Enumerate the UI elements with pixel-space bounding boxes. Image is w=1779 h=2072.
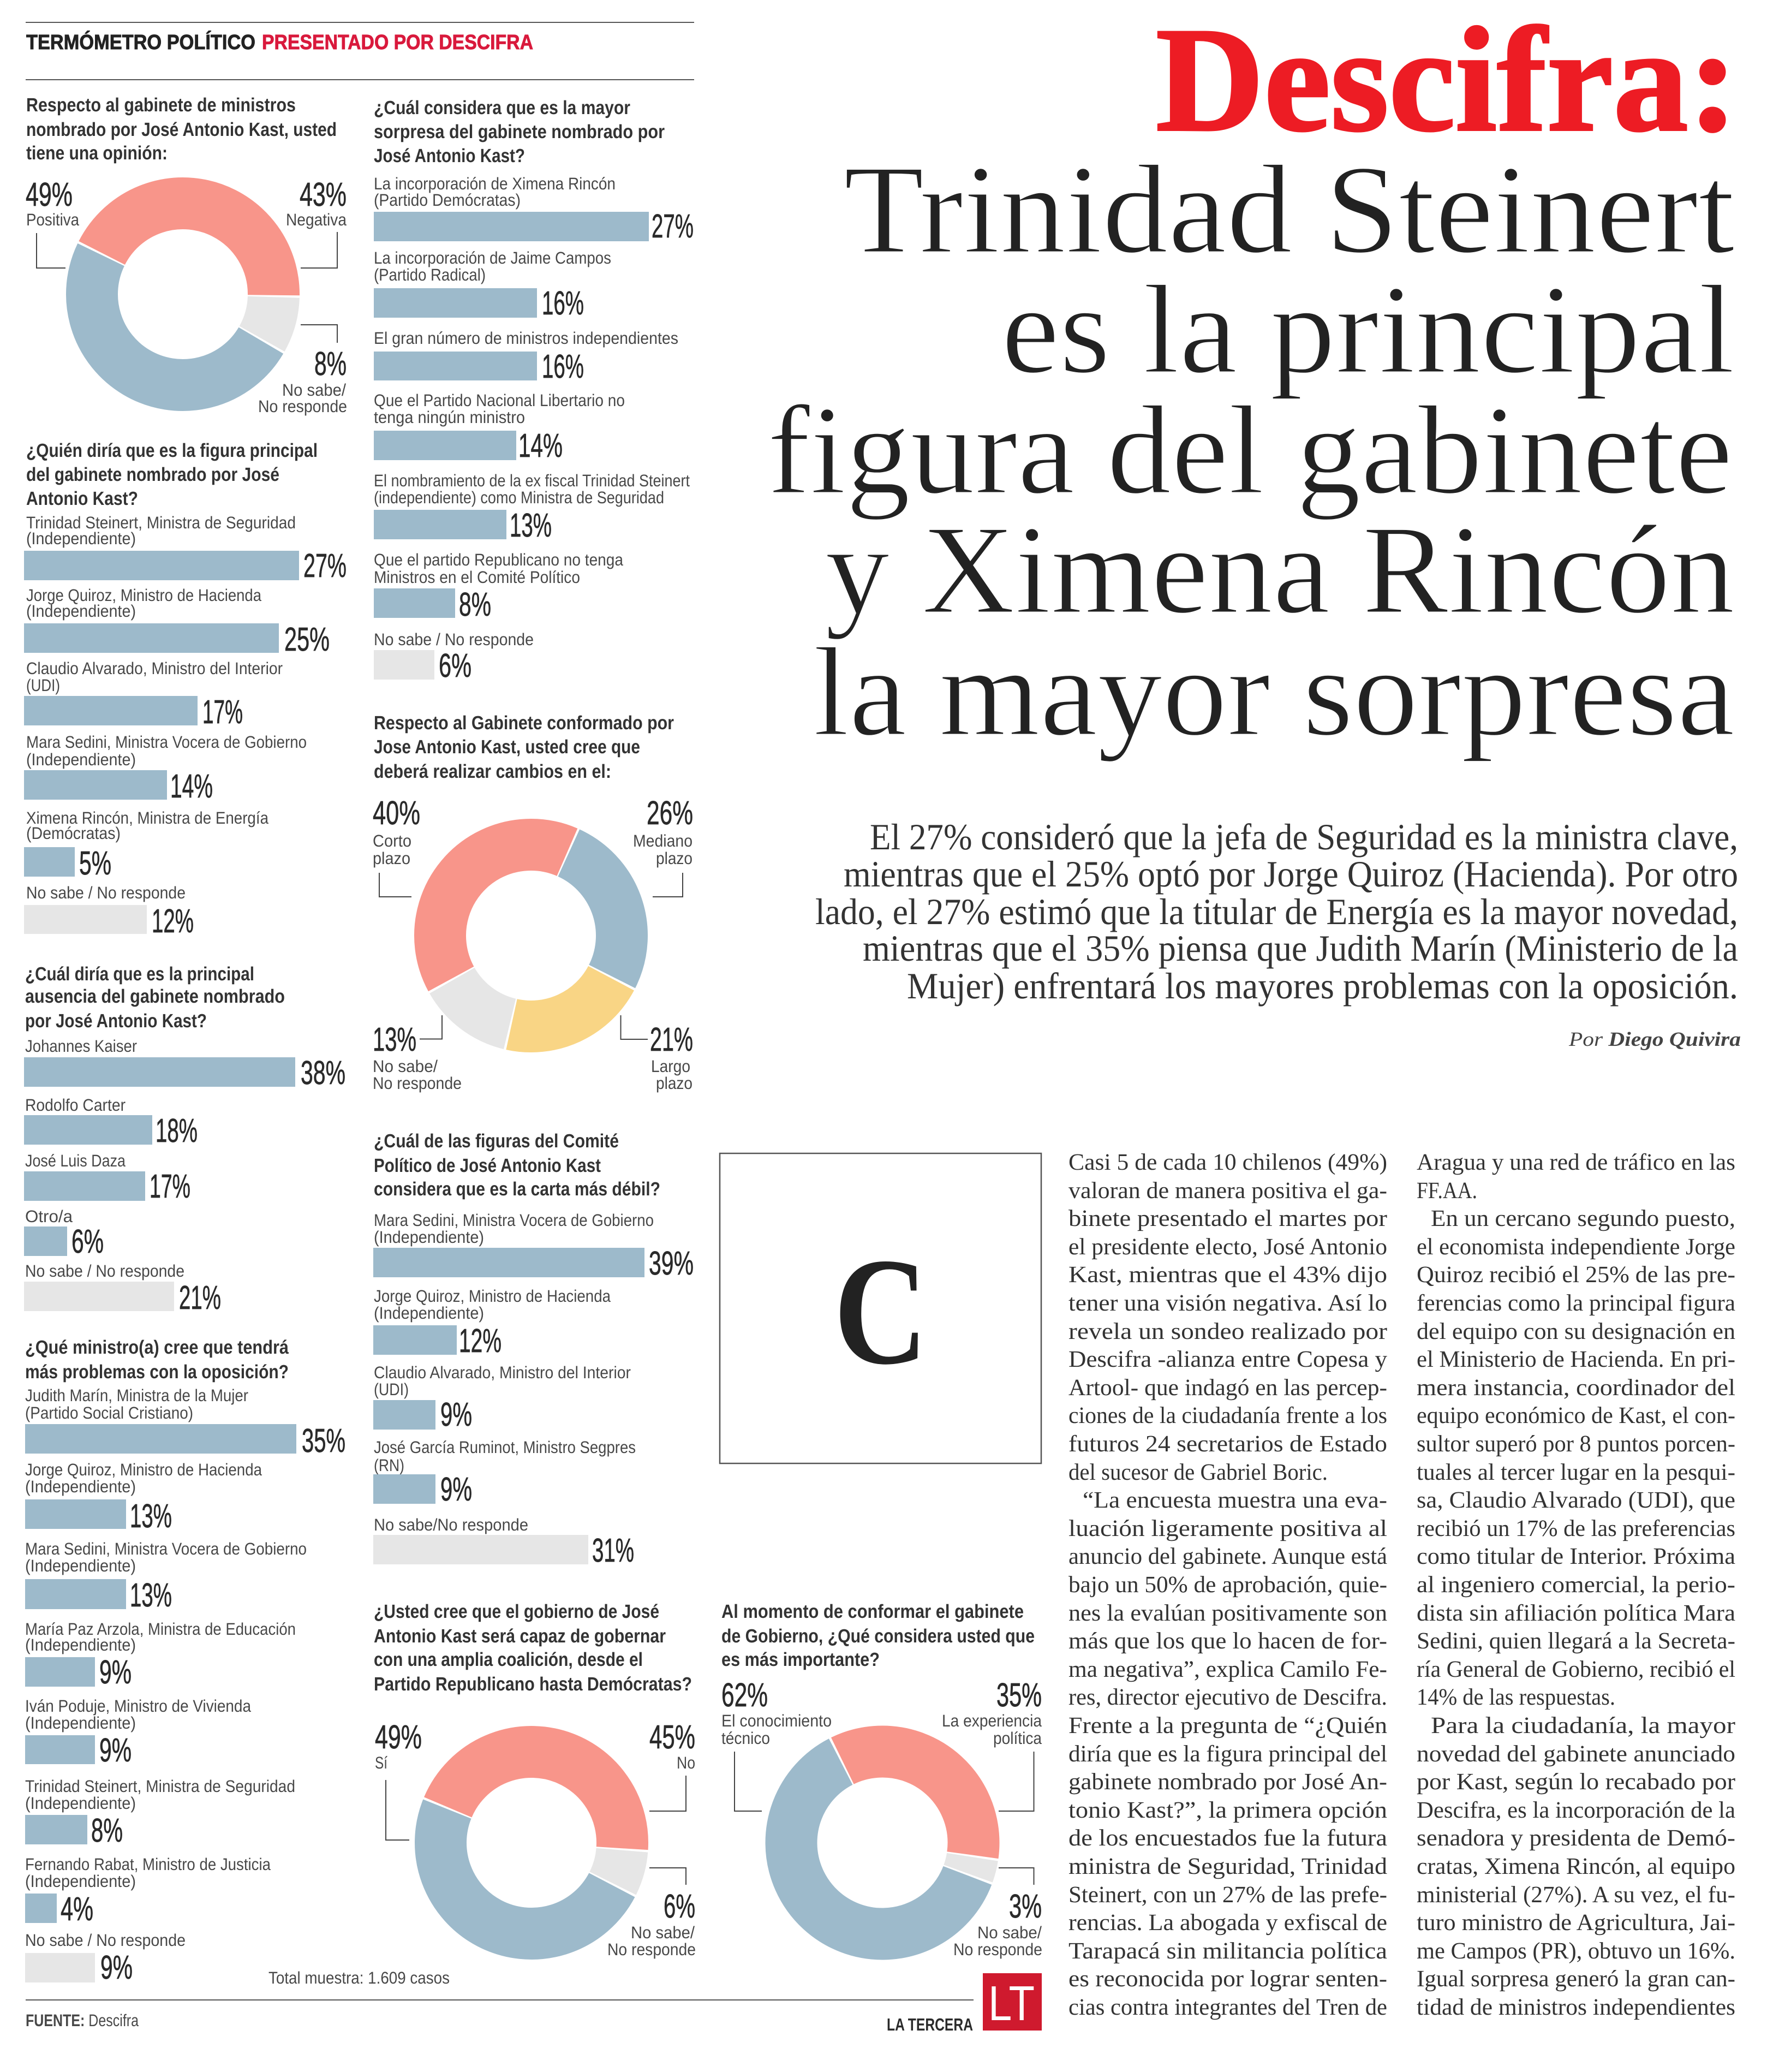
- bar: Iván Poduje 9%: [25, 1696, 252, 1769]
- donut labels: Corto: [373, 831, 411, 850]
- article column 1: bajo un 50% de aprobación, quie-: [1068, 1572, 1387, 1598]
- article column 2: ministerial (27%). A su vez, el fu-: [1417, 1882, 1735, 1908]
- bar: Fernando Rabat 4%: 4%: [61, 1890, 93, 1927]
- bar: José García Ruminot 9%: (RN): [374, 1456, 404, 1475]
- article column 2: cratas, Ximena Rincón, al equipo: [1417, 1854, 1735, 1879]
- donut labels: plazo: [373, 849, 410, 868]
- bar: ex fiscal Trinidad Steinert 13%: 13%: [510, 507, 552, 544]
- article column 2: sultor superó por 8 puntos porcen-: [1417, 1431, 1735, 1457]
- bar: No sabe 12%: No sabe / No responde: [26, 883, 186, 902]
- bar: Ximena Rincón 27%: 27%: [652, 207, 694, 245]
- section header: Termómetro político: PRESENTADO POR DESCIFRA: [262, 31, 533, 54]
- question heading: ¿Qué ministro(a) cree que tendrá: [25, 1337, 289, 1358]
- logo: LT: LT: [988, 1976, 1035, 2031]
- bar: Jorge Quiroz 12%: (Independiente): [374, 1303, 484, 1323]
- question heading: ¿Cuál considera que es la mayor: [374, 97, 630, 118]
- question heading: por José Antonio Kast?: [25, 1010, 207, 1032]
- bar: Rodolfo Carter 18%: 18%: [156, 1112, 198, 1149]
- footer: fuente y logo: FUENTE: Descifra: [26, 2011, 139, 2030]
- bar: Ximena Rincón 5%: Ximena Rincón, Ministra de Energía: [26, 808, 269, 827]
- bar: Trinidad Steinert 8%: Trinidad Steinert, Ministra de Seguridad: [25, 1777, 295, 1796]
- question heading: del gabinete nombrado por José: [26, 464, 279, 485]
- panel: problemas con la oposición: [25, 1337, 345, 1986]
- bar: Jorge Quiroz 13%: (Independiente): [25, 1477, 136, 1496]
- bar: José García Ruminot 9%: 9%: [440, 1470, 472, 1508]
- panel: plazo de los cambios: [373, 712, 693, 1093]
- question heading: [374, 1601, 692, 1695]
- bar: Otro/a 6%: 6%: [71, 1223, 104, 1260]
- bar: No sabe 31%: No sabe/No responde: [374, 1515, 528, 1534]
- donut labels: No sabe/: [631, 1923, 695, 1942]
- bar: José García Ruminot 9%: [373, 1438, 636, 1508]
- headline: figura del gabinete: [767, 380, 1733, 521]
- article column 1: tener una visión negativa. Así lo: [1068, 1290, 1387, 1316]
- bar: Judith Marín 35%: (Partido Social Cristiano): [25, 1403, 193, 1422]
- article column 1: ciones de la ciudadanía frente a los: [1068, 1403, 1387, 1428]
- bar: Partido Republicano 8%: Que el partido Republicano no tenga: [374, 550, 624, 569]
- bar: Jorge Quiroz 25%: [24, 586, 330, 658]
- bar: No sabe 31%: 31%: [592, 1532, 634, 1569]
- question heading: Antonio Kast será capaz de gobernar: [374, 1626, 666, 1647]
- article column 2: Quiroz recibió el 25% de las pre-: [1417, 1262, 1735, 1288]
- donut labels: No responde: [607, 1940, 696, 1959]
- donut labels: 43%: [300, 176, 347, 213]
- icon: letter C box: C: [834, 1226, 928, 1396]
- article column 1: cias contra integrantes del Tren de: [1068, 1994, 1387, 2020]
- bar: Johannes Kaiser 38%: [24, 1037, 345, 1091]
- donut labels: 21%: [650, 1021, 693, 1058]
- bar: Trinidad Steinert 27%: Trinidad Steinert, Ministra de Seguridad: [26, 513, 296, 532]
- bar: Mara Sedini 39%: 39%: [649, 1245, 694, 1282]
- footer: fuente y logo: [26, 1973, 1042, 2034]
- donut labels: No responde: [953, 1940, 1042, 1959]
- bar: Judith Marín 35%: Judith Marín, Ministra de la Mujer: [25, 1386, 248, 1405]
- article column 2: Aragua y una red de tráfico en las: [1417, 1150, 1735, 1175]
- bar: Partido Nacional Libertario 14%: Que el Partido Nacional Libertario no: [374, 391, 625, 410]
- question heading: [26, 440, 318, 509]
- article column 1: valoran de manera positiva el ga-: [1068, 1178, 1387, 1204]
- donut labels: [721, 1676, 1042, 1959]
- bar: No sabe 12%: [24, 883, 194, 939]
- bar: Jorge Quiroz 12%: Jorge Quiroz, Ministro de Hacienda: [374, 1287, 611, 1306]
- bar: Jaime Campos 16%: La incorporación de Jaime Campos: [374, 248, 611, 267]
- bar: Trinidad Steinert 8%: 8%: [91, 1812, 123, 1849]
- article column 1: “La encuesta muestra una eva-: [1083, 1487, 1387, 1513]
- donut labels: No responde: [258, 397, 347, 416]
- article column 1: res, director ejecutivo de Descifra.: [1068, 1684, 1387, 1710]
- article column 2: Sedini, quien llegará a la Secreta-: [1417, 1628, 1735, 1654]
- question heading: Político de José Antonio Kast: [374, 1155, 601, 1176]
- section header: Termómetro político: TERMÓMETRO POLÍTICO: [26, 31, 255, 54]
- article column 1: Frente a la pregunta de “¿Quién: [1068, 1713, 1387, 1738]
- bar: María Paz Arzola 9%: María Paz Arzola, Ministra de Educación: [25, 1620, 296, 1639]
- donut labels: 13%: [373, 1021, 416, 1058]
- bar: ministros independientes 16%: [374, 329, 678, 385]
- bar: ex fiscal Trinidad Steinert 13%: El nombramiento de la ex fiscal Trinidad Steinert: [374, 471, 690, 490]
- article column 2: el Ministerio de Hacienda. En pri-: [1417, 1347, 1735, 1372]
- donut labels: No: [677, 1753, 695, 1772]
- bar: Partido Nacional Libertario 14%: tenga ningún ministro: [374, 408, 525, 427]
- bar: Trinidad Steinert 27%: (Independiente): [26, 529, 136, 548]
- bar: No sabe 9%: 9%: [100, 1949, 133, 1986]
- donut labels: 62%: [721, 1676, 768, 1713]
- bar: Jorge Quiroz 12%: [373, 1287, 611, 1359]
- bar: Claudio Alvarado 17%: (UDI): [26, 676, 60, 695]
- article column 2: Para la ciudadanía, la mayor: [1431, 1713, 1735, 1738]
- bar: No sabe 21%: 21%: [179, 1279, 221, 1316]
- article column 2: Igual sorpresa generó la gran can-: [1417, 1966, 1735, 1992]
- question heading: considera que es la carta más débil?: [374, 1178, 660, 1200]
- deck text: mientras que el 35% piensa que Judith Marín (Ministerio de la: [863, 927, 1738, 969]
- headline: [767, 0, 1738, 763]
- article column 1: más que los que lo hacen de for-: [1068, 1628, 1387, 1654]
- bar: Mara Sedini 13%: 13%: [130, 1576, 172, 1613]
- article column 2: 14% de las respuestas.: [1417, 1684, 1615, 1710]
- question heading: Antonio Kast?: [26, 488, 138, 509]
- deck text: lado, el 27% estimó que la titular de Energía es la mayor novedad,: [815, 891, 1738, 932]
- panel: amplia coalición: [374, 1601, 696, 1966]
- article column 2: En un cercano segundo puesto,: [1431, 1206, 1735, 1231]
- bar: Claudio Alvarado 17%: 17%: [202, 693, 243, 730]
- bar: Otro/a 6%: Otro/a: [25, 1207, 73, 1226]
- bar: Mara Sedini 13%: [25, 1539, 307, 1613]
- bar: Partido Republicano 8%: 8%: [459, 586, 491, 623]
- question heading: [26, 94, 337, 164]
- bar: Johannes Kaiser 38%: 38%: [301, 1054, 345, 1091]
- question heading: [25, 963, 285, 1032]
- bar: María Paz Arzola 9%: [25, 1620, 296, 1690]
- article column 2: Descifra, es la incorporación de la: [1417, 1797, 1735, 1823]
- donut labels: [375, 1718, 696, 1959]
- article column 1: el presidente electo, José Antonio: [1068, 1234, 1387, 1260]
- article column 1: nes la evalúan positivamente son: [1068, 1600, 1387, 1626]
- bar: Jorge Quiroz 25%: (Independiente): [26, 602, 136, 621]
- donut chart: [58, 170, 307, 419]
- question heading: José Antonio Kast?: [374, 145, 525, 166]
- bar: Jaime Campos 16%: [374, 248, 611, 321]
- bar: María Paz Arzola 9%: (Independiente): [25, 1635, 136, 1654]
- bar: Judith Marín 35%: 35%: [302, 1422, 345, 1459]
- question heading: más problemas con la oposición?: [25, 1361, 289, 1383]
- bar: Mara Sedini 39%: (Independiente): [374, 1228, 484, 1247]
- section header: Termómetro político: [26, 22, 694, 80]
- article column 1: de los encuestados fue la futura: [1068, 1825, 1387, 1851]
- bar: Mara Sedini 14%: 14%: [170, 767, 213, 805]
- article column 2: al ingeniero comercial, la perio-: [1417, 1572, 1735, 1598]
- question heading: [374, 712, 674, 782]
- bar: ministros independientes 16%: 16%: [542, 348, 584, 385]
- donut labels: plazo: [656, 1074, 693, 1093]
- donut labels: 40%: [373, 794, 420, 831]
- article column 2: ferencias como la principal figura: [1417, 1290, 1735, 1316]
- article column 1: luación ligeramente positiva al: [1068, 1516, 1387, 1541]
- article column 1: diría que es la figura principal del: [1068, 1741, 1387, 1767]
- deck text: mientras que el 25% optó por Jorge Quiroz (Hacienda). Por otro: [844, 853, 1738, 895]
- bar: Claudio Alvarado 9%: 9%: [440, 1396, 472, 1433]
- bar: José Luis Daza 17%: 17%: [150, 1168, 190, 1205]
- donut labels: No responde: [373, 1074, 462, 1093]
- donut labels: Positiva: [26, 210, 80, 229]
- donut labels: técnico: [721, 1729, 770, 1748]
- article column 1: Descifra -alianza entre Copesa y: [1068, 1347, 1388, 1372]
- article column 1: rencias. La abogada y exfiscal de: [1068, 1910, 1387, 1936]
- bar: Mara Sedini 14%: [24, 733, 307, 805]
- donut labels: 8%: [314, 345, 347, 382]
- question heading: Respecto al gabinete de ministros: [26, 94, 296, 116]
- bar: Partido Republicano 8%: Ministros en el Comité Político: [374, 568, 580, 587]
- donut chart: [408, 812, 654, 1059]
- question heading: ¿Cuál de las figuras del Comité: [374, 1130, 619, 1152]
- question heading: Partido Republicano hasta Demócratas?: [374, 1674, 692, 1695]
- bar: Jorge Quiroz 13%: [25, 1460, 262, 1534]
- article column 1: Artool- que indagó en las percep-: [1068, 1375, 1387, 1401]
- article column 2: me Campos (PR), obtuvo un 16%.: [1417, 1938, 1735, 1964]
- question heading: tiene una opinión:: [26, 142, 168, 164]
- question heading: [374, 97, 665, 166]
- donut labels: No sabe/: [373, 1057, 438, 1076]
- panel: carta más débil: [373, 1130, 694, 1569]
- bar: José García Ruminot 9%: José García Ruminot, Ministro Segpres: [374, 1438, 636, 1457]
- article column 2: tidad de ministros independientes: [1417, 1994, 1735, 2020]
- donut labels: [26, 176, 347, 416]
- bar: Mara Sedini 14%: (Independiente): [26, 750, 136, 769]
- article column 2: senadora y presidenta de Demó-: [1417, 1825, 1735, 1851]
- bar: Partido Republicano 8%: [374, 550, 624, 623]
- article column 2: como titular de Interior. Próxima: [1417, 1544, 1735, 1569]
- icon: letter C box: [720, 1153, 1041, 1463]
- bar: Ximena Rincón 5%: 5%: [79, 844, 111, 882]
- bar: Ximena Rincón 27%: La incorporación de Ximena Rincón: [374, 174, 616, 193]
- bar: ex fiscal Trinidad Steinert 13%: (independiente) como Ministra de Seguridad: [374, 488, 664, 507]
- bar: Ximena Rincón 5%: [24, 808, 269, 882]
- donut labels: El conocimiento: [721, 1711, 832, 1730]
- panel: qué es más importante: [721, 1601, 1042, 1964]
- bar: Jorge Quiroz 12%: 12%: [459, 1322, 502, 1359]
- article column 2: equipo económico de Kast, el con-: [1417, 1403, 1735, 1428]
- bar: No sabe 9%: [25, 1931, 186, 1986]
- question heading: [721, 1601, 1035, 1670]
- article column 2: novedad del gabinete anunciado: [1417, 1741, 1735, 1767]
- article column 1: Kast, mientras que el 43% dijo: [1068, 1262, 1387, 1288]
- bar: Iván Poduje 9%: (Independiente): [25, 1713, 136, 1732]
- bar: Mara Sedini 13%: (Independiente): [25, 1556, 136, 1575]
- donut labels: 6%: [664, 1888, 695, 1925]
- donut labels: 49%: [26, 176, 73, 213]
- question heading: ¿Cuál diría que es la principal: [25, 963, 254, 985]
- bar: No sabe 21%: [24, 1261, 221, 1316]
- article column 2: dista sin afiliación política Mara: [1417, 1600, 1735, 1626]
- bar: Ximena Rincón 27%: (Partido Demócratas): [374, 190, 521, 210]
- article column 2: del equipo con su designación en: [1417, 1319, 1735, 1344]
- question heading: sorpresa del gabinete nombrado por: [374, 121, 665, 142]
- headline: es la principal: [1001, 259, 1735, 400]
- bar: Jaime Campos 16%: 16%: [542, 284, 584, 321]
- bar: Mara Sedini 39%: Mara Sedini, Ministra Vocera de Gobierno: [374, 1211, 654, 1230]
- bar: Ximena Rincón 27%: [374, 174, 694, 245]
- question heading: [25, 1337, 289, 1383]
- bar: Ximena Rincón 5%: (Demócratas): [26, 824, 121, 843]
- bar: Fernando Rabat 4%: Fernando Rabat, Ministro de Justicia: [25, 1855, 271, 1874]
- question heading: [374, 1130, 660, 1200]
- article column 2: recibió un 17% de las preferencias: [1417, 1516, 1735, 1541]
- bar: José Luis Daza 17%: José Luis Daza: [25, 1151, 126, 1170]
- bar: Jaime Campos 16%: (Partido Radical): [374, 265, 486, 284]
- donut chart: [761, 1721, 1004, 1964]
- bar: Otro/a 6%: [24, 1207, 104, 1260]
- bar: ministros independientes 16%: El gran número de ministros independientes: [374, 329, 678, 348]
- article column 1: ma negativa”, explica Camilo Fe-: [1068, 1657, 1387, 1682]
- donut labels: [373, 794, 693, 1093]
- donut labels: Negativa: [286, 210, 347, 229]
- bar: Claudio Alvarado 17%: [24, 659, 283, 730]
- bar: No sabe 9%: No sabe / No responde: [25, 1931, 186, 1950]
- bar: Trinidad Steinert 27%: [24, 513, 347, 584]
- panel: figura principal del gabinete: [24, 440, 347, 939]
- sample size note: Total muestra: 1.609 casos: [268, 1968, 450, 1987]
- bar: Rodolfo Carter 18%: [24, 1095, 198, 1149]
- donut labels: 35%: [996, 1676, 1042, 1713]
- donut labels: 45%: [649, 1718, 695, 1755]
- donut labels: 49%: [375, 1718, 422, 1755]
- bar: Judith Marín 35%: [25, 1386, 345, 1459]
- panel: opinión sobre el gabinete: [26, 94, 347, 419]
- panel: mayor sorpresa: [374, 97, 694, 684]
- bar: Partido Nacional Libertario 14%: [374, 391, 625, 464]
- byline: Por Diego Quivira: [1568, 1028, 1741, 1051]
- bar: Fernando Rabat 4%: (Independiente): [25, 1872, 136, 1891]
- headline: Descifra:: [1156, 0, 1738, 163]
- question heading: deberá realizar cambios en el:: [374, 761, 611, 782]
- deck text: [815, 816, 1738, 1007]
- question heading: ¿Quién diría que es la figura principal: [26, 440, 318, 461]
- article column 1: revela un sondeo realizado por: [1068, 1319, 1387, 1344]
- article column 2: FF.AA.: [1417, 1178, 1477, 1204]
- article column 2: ría General de Gobierno, recibió el: [1417, 1657, 1735, 1682]
- article column 2: sa, Claudio Alvarado (UDI), que: [1417, 1487, 1735, 1513]
- donut labels: 3%: [1009, 1888, 1042, 1925]
- article column 1: binete presentado el martes por: [1068, 1206, 1387, 1231]
- bar: Trinidad Steinert 8%: (Independiente): [25, 1794, 136, 1813]
- bar: Mara Sedini 13%: Mara Sedini, Ministra Vocera de Gobierno: [25, 1539, 307, 1558]
- bar: No sabe 6%: 6%: [439, 647, 471, 684]
- bar: Johannes Kaiser 38%: Johannes Kaiser: [25, 1037, 137, 1056]
- bar: Jorge Quiroz 13%: 13%: [130, 1497, 172, 1534]
- bar: Jorge Quiroz 25%: 25%: [284, 621, 330, 658]
- question heading: Respecto al Gabinete conformado por: [374, 712, 674, 734]
- donut chart: [409, 1720, 654, 1966]
- article column 2: por Kast, según lo recabado por: [1417, 1769, 1735, 1795]
- headline: la mayor sorpresa: [813, 622, 1735, 763]
- donut labels: Largo: [651, 1057, 690, 1076]
- bar: Claudio Alvarado 9%: Claudio Alvarado, Ministro del Interior: [374, 1363, 631, 1382]
- question heading: con una amplia coalición, desde el: [374, 1649, 643, 1670]
- bar: No sabe 12%: 12%: [152, 902, 194, 939]
- bar: No sabe 6%: [374, 630, 534, 684]
- panel: principal ausencia: [24, 963, 345, 1316]
- donut labels: La experiencia: [942, 1711, 1042, 1730]
- article column 1: Casi 5 de cada 10 chilenos (49%): [1068, 1150, 1387, 1175]
- article column 2: turo ministro de Agricultura, Jai-: [1417, 1910, 1735, 1936]
- article column 1: tonio Kast?”, la primera opción: [1068, 1797, 1387, 1823]
- donut labels: 26%: [647, 794, 693, 831]
- article column 2: mera instancia, coordinador del: [1417, 1375, 1735, 1401]
- question heading: ausencia del gabinete nombrado: [25, 986, 285, 1007]
- headline: Trinidad Steinert: [844, 139, 1735, 280]
- bar: Rodolfo Carter 18%: Rodolfo Carter: [25, 1095, 126, 1115]
- donut labels: política: [993, 1729, 1042, 1748]
- article column 1: [1068, 1150, 1388, 2020]
- bar: No sabe 31%: [373, 1515, 634, 1569]
- article column 1: ministra de Seguridad, Trinidad: [1068, 1854, 1387, 1879]
- bar: No sabe 21%: No sabe / No responde: [25, 1261, 184, 1281]
- bar: Mara Sedini 14%: Mara Sedini, Ministra Vocera de Gobierno: [26, 733, 307, 752]
- article column 1: anuncio del gabinete. Aunque está: [1068, 1544, 1387, 1569]
- bar: Jorge Quiroz 13%: Jorge Quiroz, Ministro de Hacienda: [25, 1460, 262, 1479]
- question heading: ¿Usted cree que el gobierno de José: [374, 1601, 659, 1622]
- bar: Claudio Alvarado 9%: (UDI): [374, 1380, 409, 1399]
- article column 2: [1417, 1150, 1735, 2020]
- article column 1: Tarapacá sin militancia política: [1068, 1938, 1387, 1964]
- bar: No sabe 6%: No sabe / No responde: [374, 630, 534, 649]
- bar: Partido Nacional Libertario 14%: 14%: [518, 427, 563, 464]
- article column 1: del sucesor de Gabriel Boric.: [1068, 1460, 1328, 1485]
- donut labels: Mediano: [633, 831, 693, 850]
- deck text: El 27% consideró que la jefa de Seguridad es la ministra clave,: [870, 816, 1738, 858]
- question heading: nombrado por José Antonio Kast, usted: [26, 119, 337, 140]
- bar: ex fiscal Trinidad Steinert 13%: [374, 471, 690, 544]
- bar: Claudio Alvarado 9%: [373, 1363, 631, 1433]
- article column 1: es reconocida por lograr senten-: [1068, 1966, 1387, 1992]
- question heading: Al momento de conformar el gabinete: [721, 1601, 1024, 1622]
- article column 1: gabinete nombrado por José An-: [1068, 1769, 1387, 1795]
- bar: Claudio Alvarado 17%: Claudio Alvarado, Ministro del Interior: [26, 659, 283, 678]
- article column 2: el economista independiente Jorge: [1417, 1234, 1735, 1260]
- bar: Iván Poduje 9%: 9%: [99, 1731, 132, 1769]
- donut labels: Sí: [375, 1753, 387, 1772]
- footer: fuente y logo: LA TERCERA: [887, 2015, 973, 2034]
- bar: María Paz Arzola 9%: 9%: [99, 1653, 132, 1690]
- bar: Jorge Quiroz 25%: Jorge Quiroz, Ministro de Hacienda: [26, 586, 262, 605]
- donut labels: plazo: [656, 849, 693, 868]
- article column 1: futuros 24 secretarios de Estado: [1068, 1431, 1387, 1457]
- bar: Trinidad Steinert 27%: 27%: [303, 547, 347, 584]
- bar: Mara Sedini 39%: [373, 1211, 694, 1282]
- bar: Fernando Rabat 4%: [25, 1855, 271, 1927]
- donut labels: No sabe/: [977, 1923, 1042, 1942]
- article column 2: tuales al tercer lugar en la pesqui-: [1417, 1460, 1735, 1485]
- question heading: es más importante?: [721, 1649, 880, 1670]
- deck text: Mujer) enfrentará los mayores problemas con la oposición.: [907, 965, 1738, 1007]
- question heading: Jose Antonio Kast, usted cree que: [374, 736, 640, 758]
- bar: Trinidad Steinert 8%: [25, 1777, 295, 1849]
- question heading: de Gobierno, ¿Qué considera usted que: [721, 1626, 1035, 1647]
- headline: y Ximena Rincón: [825, 499, 1735, 640]
- donut labels: No sabe/: [282, 380, 346, 400]
- bar: Iván Poduje 9%: Iván Poduje, Ministro de Vivienda: [25, 1696, 252, 1716]
- bar: José Luis Daza 17%: [24, 1151, 190, 1205]
- article column 1: Steinert, con un 27% de las prefe-: [1068, 1882, 1387, 1908]
